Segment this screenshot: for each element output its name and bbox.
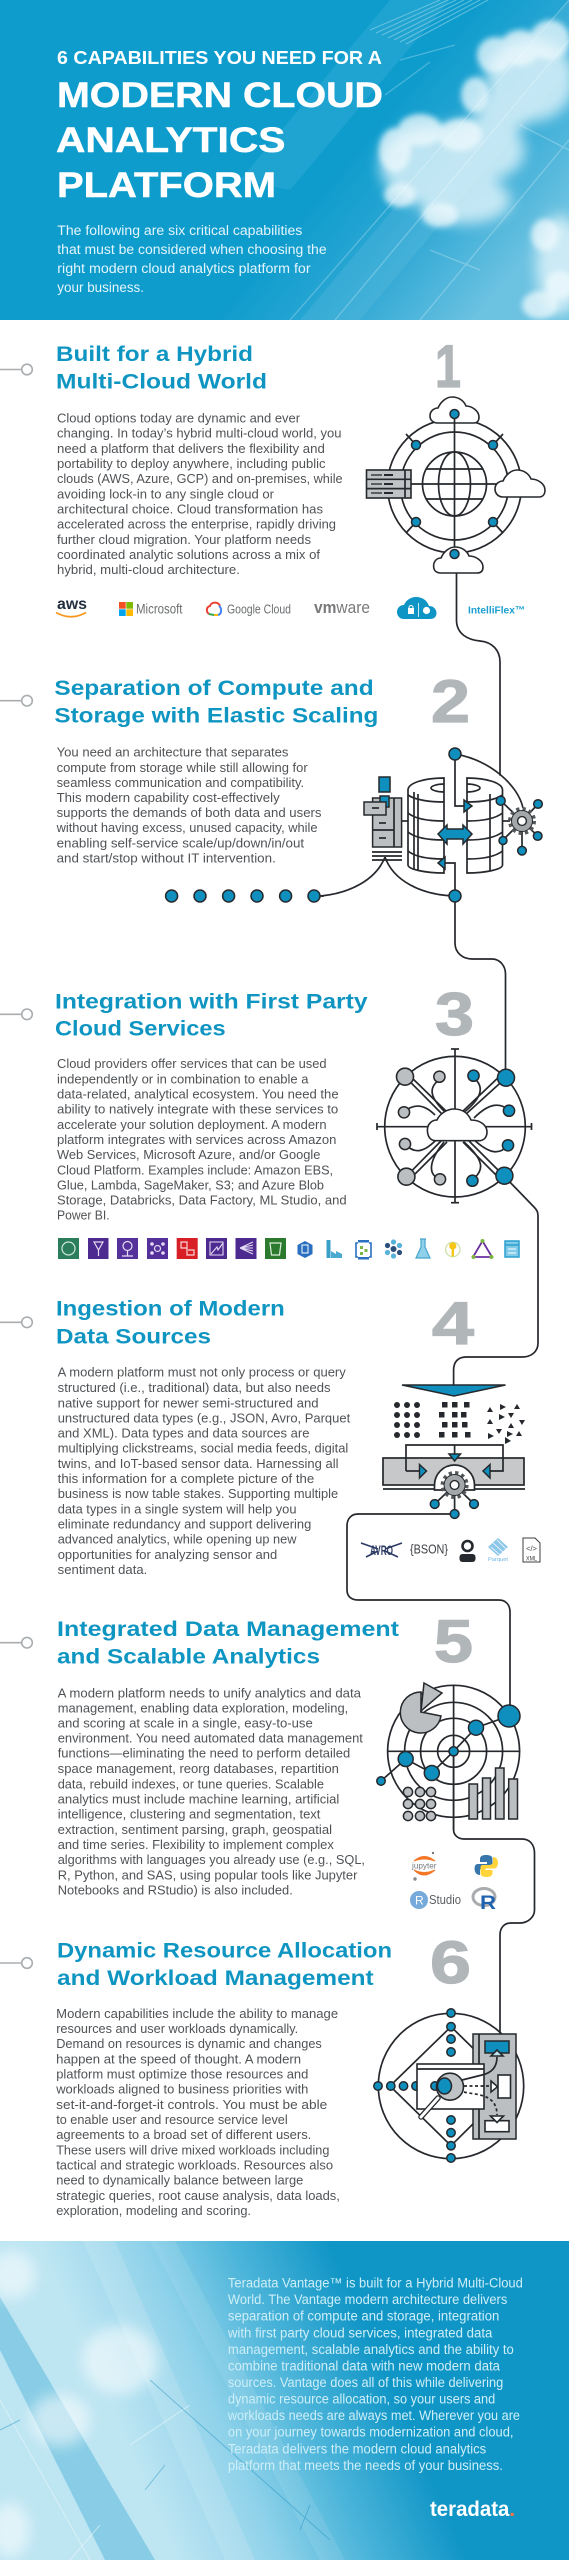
section 1 heading: Built for a Hybrid [56, 342, 253, 366]
section 1 body text: need a platform that delivers the flexibility and [57, 441, 325, 456]
section 4 connector marker [0, 1317, 32, 1328]
logos: cloud service icons [58, 1238, 519, 1260]
section 1 body text: further cloud migration. Your platform needs [57, 532, 311, 547]
magnifier [421, 2073, 464, 2117]
section 1 body text: portability to deploy anywhere, including public [57, 456, 326, 471]
section 6 body text: set-it-and-forget-it controls. You must be able [56, 2097, 327, 2112]
connector line running through sections [347, 573, 538, 2042]
logo: Teradata cloud [397, 597, 436, 619]
section 1 heading [56, 342, 267, 393]
header intro text [57, 223, 327, 295]
section 2 body text: This modern capability cost-effectively [57, 790, 280, 805]
section 3 body text [57, 1056, 347, 1223]
logo: IntelliFlex: IntelliFlex™ [468, 604, 525, 616]
section 5 body text: and scoring at scale in a single, easy-to-use [58, 1716, 313, 1731]
footer summary text: management, scalable analytics and the ability to [228, 2342, 514, 2357]
illustration: storage cylinder, cabinet and gear [321, 748, 542, 902]
section 1 panel [0, 333, 545, 619]
circle grid [403, 1787, 436, 1821]
section 2 body text: You need an architecture that separates [57, 745, 289, 760]
section 6 body text: tactical and strategic workloads. Resources also [56, 2158, 333, 2173]
main title: MODERN CLOUD [57, 76, 383, 115]
section 5 body text: and time series. Flexibility to implement complex [58, 1837, 334, 1852]
links from magnifier to panel [462, 2057, 497, 2115]
section 3 body text: Cloud Platform. Examples include: Amazon EBS, [57, 1162, 333, 1177]
section 3 heading: Cloud Services [55, 1017, 226, 1041]
section 3 body text: Power BI. [57, 1208, 110, 1223]
panel: footer [0, 2241, 569, 2560]
footer summary text [227, 2275, 523, 2473]
logo: XML: XML [526, 1556, 538, 1562]
section 3 body text: Cloud providers offer services that can be used [57, 1056, 327, 1071]
section 3 panel [0, 981, 532, 1260]
section 1 heading: Multi-Cloud World [56, 369, 267, 393]
section 2 heading: Separation of Compute and [54, 676, 374, 700]
header background with clouds and building [0, 0, 569, 320]
section 5 connector marker [0, 1637, 32, 1648]
section 5 body text: data, rebuild indexes, or tune queries. Scalable [58, 1776, 324, 1791]
section 2 connector marker [0, 695, 32, 706]
section 2 body text [56, 745, 322, 865]
section 6 body text: to enable user and resource service level [56, 2112, 288, 2127]
footer summary text: World. The Vantage modern architecture delivers [228, 2292, 508, 2307]
section 5 body text: environment. You need automated data management [58, 1731, 363, 1746]
section 5 body text: A modern platform needs to unify analytics and data [58, 1685, 362, 1700]
section 6 connector marker [0, 1958, 32, 1968]
section 6 body text: agreements to a broad set of different users. [56, 2127, 311, 2142]
logo: Avro: AVRO [370, 1542, 393, 1558]
intake box [383, 1445, 525, 1490]
triangle data points [487, 1404, 525, 1444]
section 3 connector marker [0, 1009, 32, 1020]
header intro text: that must be considered when choosing the [57, 242, 327, 257]
section 2 body text: supports the demands of both data and users [57, 805, 322, 820]
section 6 panel [0, 1929, 524, 2218]
logo: RStudio: R [415, 1894, 424, 1908]
section 3 body text: platform integrates with services across Amazon [57, 1132, 336, 1147]
illustration: cloud hub with services [377, 1049, 532, 1203]
main title [56, 76, 383, 205]
control panel [473, 2034, 516, 2139]
data points [377, 1705, 520, 1785]
round data points [394, 1402, 420, 1438]
row of dots [166, 890, 324, 902]
illustration: hybrid cloud globe [366, 397, 545, 573]
section 6 body text: resources and user workloads dynamically. [56, 2021, 298, 2036]
section 6 body text: workloads aligned to business priorities with [55, 2082, 308, 2097]
section 2 body text: enabling self-service scale/up/down/in/out [57, 835, 304, 850]
section 5 body text [58, 1685, 365, 1897]
section 5 body text: intelligence, clustering and segmentation, text [58, 1807, 321, 1822]
section 6 body text: Demand on resources is dynamic and changes [56, 2036, 322, 2051]
logo: teradata: teradata. [430, 2498, 515, 2521]
window [417, 2064, 484, 2109]
logo: aws: aws [57, 596, 87, 613]
section 1 body text [57, 410, 343, 577]
section 2 heading: Storage with Elastic Scaling [54, 704, 378, 728]
logo: Google Cloud [207, 602, 291, 616]
section 4 heading: Data Sources [56, 1324, 211, 1348]
header intro text: The following are six critical capabilities [57, 223, 303, 238]
footer summary text: combine traditional data with new modern data [228, 2358, 500, 2373]
footer summary text: Teradata delivers the modern cloud analytics [228, 2441, 486, 2456]
section 1 number: 1 [435, 333, 461, 400]
section 5 body text: extraction, sentiment parsing, graph, geospatial [58, 1822, 332, 1837]
section 4 body text: multiplying clickstreams, social media feeds, digital [58, 1441, 348, 1456]
section 3 heading [55, 989, 368, 1041]
section 1 body text: hybrid, multi-cloud architecture. [57, 562, 240, 577]
logo: Parquet [488, 1538, 508, 1563]
section 6 body text [55, 2006, 340, 2218]
section 4 body text: unstructured data types (e.g., JSON, Avro, Parquet [58, 1410, 351, 1425]
section 3 heading: Integration with First Party [55, 989, 368, 1013]
section 5 body text: Notebooks and RStudio) is also included. [58, 1882, 293, 1897]
pie chart [400, 1683, 442, 1733]
logos: data formats [361, 1538, 540, 1563]
main title: ANALYTICS [56, 121, 286, 160]
section 6 heading: and Workload Management [57, 1966, 374, 1990]
section 4 body text: this information for a complete picture of the [58, 1471, 314, 1486]
illustration: analytics radar with charts [377, 1683, 520, 1830]
footer summary text: dynamic resource allocation, so your users and [228, 2392, 495, 2407]
section 4 body text: opportunities for analyzing sensor and [58, 1547, 277, 1562]
node chains [374, 2009, 455, 2162]
section 2 number: 2 [431, 668, 470, 735]
section 5 heading: Integrated Data Management [57, 1617, 399, 1641]
section 5 body text: space management, reorg databases, repartition [58, 1761, 339, 1776]
footer summary text: platform that meets the needs of your business. [228, 2458, 503, 2473]
section 2 body text: seamless communication and compatibility. [57, 775, 304, 790]
section 3 body text: ability to natively integrate with these services to [57, 1102, 338, 1117]
footer summary text: workloads needs are always met. Wherever you are [227, 2408, 520, 2423]
section 2 body text: compute from storage while still allowing for [57, 760, 308, 775]
footer summary text: sources. Vantage does all of this while delivering [228, 2375, 503, 2390]
double arrow [438, 825, 472, 844]
footer summary text: with first party cloud services, integrated data [227, 2325, 493, 2340]
section 6 body text: platform must optimize those resources and [56, 2067, 308, 2082]
section 2 panel [0, 668, 542, 902]
footer summary text: on your journey towards modernization and cloud, [228, 2425, 514, 2440]
section 4 number: 4 [432, 1290, 475, 1357]
header intro text: right modern cloud analytics platform for [57, 261, 311, 276]
square data points [439, 1402, 470, 1438]
section 3 number: 3 [435, 981, 474, 1048]
section 1 body text: avoiding lock-in to any single cloud or [57, 486, 275, 501]
section 5 body text: management, enabling data exploration, modeling, [58, 1701, 348, 1716]
logos: cloud partners [56, 596, 525, 619]
section 5 body text: analytics must include machine learning, artificial [58, 1791, 339, 1806]
section 6 body text: need to dynamically balance between large [56, 2173, 303, 2188]
section 1 body text: architectural choice. Cloud transformation has [57, 502, 323, 516]
section 6 body text: happen at the speed of thought. A modern [56, 2051, 301, 2066]
gear with nodes [430, 1473, 478, 1518]
footer summary text: Teradata Vantage™ is built for a Hybrid Multi-Cloud [228, 2275, 523, 2290]
section 4 body text: advanced analytics, while opening up new [58, 1532, 297, 1547]
section 4 body text: structured (i.e., traditional) data, but also needs [58, 1380, 331, 1395]
main title: PLATFORM [57, 166, 276, 205]
logo: Avro [361, 1542, 402, 1558]
footer background with building and clouds [0, 2241, 569, 2560]
section 4 heading [56, 1297, 285, 1348]
logo: Parquet: Parquet [488, 1557, 508, 1563]
section 2 heading [54, 676, 378, 728]
node network around gear [321, 754, 538, 896]
section 5 number: 5 [434, 1608, 473, 1675]
logos: analytics tools [410, 1852, 498, 1914]
section 6 body text: strategic queries, root cause analysis, data loads, [56, 2188, 340, 2203]
section 4 panel [0, 1290, 540, 1577]
section 1 body text: coordinated analytic solutions across a mix of [57, 547, 320, 562]
logo: XML: </> [526, 1544, 538, 1553]
section 5 heading [57, 1617, 399, 1668]
section 2 body text: and start/stop without IT intervention. [57, 850, 276, 865]
section 5 body text: functions—eliminating the need to perform detailed [58, 1746, 350, 1761]
filing cabinet [364, 777, 402, 860]
section 6 number: 6 [430, 1929, 471, 1996]
logo: vmware: vmware [314, 598, 370, 617]
gear [510, 809, 534, 833]
logo: XML [523, 1538, 540, 1562]
section 5 panel [0, 1608, 520, 1914]
logo: BSON: {BSON} [410, 1542, 448, 1556]
section 1 body text: changing. In today’s hybrid multi-cloud world, you [57, 426, 342, 441]
section 4 heading: Ingestion of Modern [56, 1297, 285, 1321]
section 3 body text: Storage, Databricks, Data Factory, ML Studio, and [57, 1193, 347, 1208]
section 4 body text: data types in a single system will help you [58, 1501, 297, 1516]
section 4 body text [58, 1365, 351, 1577]
section 3 body text: independently or in combination to enable a [57, 1071, 309, 1086]
section 3 body text: data-related, analytical ecosystem. You need the [57, 1086, 339, 1101]
header kicker: 6 CAPABILITIES YOU NEED FOR A [57, 48, 382, 68]
logo: ORC [460, 1541, 476, 1562]
section 2 body text: without having excess, unused capacity, while [56, 820, 318, 835]
section 5 body text: algorithms with languages you already use (e.g., SQL, [58, 1852, 365, 1867]
storage cylinder [408, 778, 502, 873]
section 5 heading: and Scalable Analytics [57, 1644, 320, 1668]
logo: Python [475, 1855, 498, 1877]
section 4 body text: and XML). Data types and data sources are [58, 1425, 310, 1440]
section 3 body text: accelerate your solution deployment. A modern [57, 1117, 327, 1132]
section 1 connector marker [0, 364, 32, 375]
header intro text: your business. [57, 280, 144, 295]
section 3 body text: Glue, Lambda, SageMaker, S3; and Azure Blob [57, 1177, 324, 1192]
section 3 body text: Web Services, Microsoft Azure, and/or Google [57, 1147, 320, 1162]
funnel arrow [402, 1385, 506, 1396]
section 1 body text: accelerated across the enterprise, rapidly driving [57, 517, 336, 532]
section 4 body text: twins, and IoT-based sensor data. Harnessing all [58, 1456, 339, 1471]
section 6 heading [57, 1939, 392, 1990]
section 6 body text: These users will drive mixed workloads including [56, 2142, 329, 2157]
footer summary text: separation of compute and storage, integration [228, 2309, 499, 2324]
section 5 body text: R, Python, and SAS, using popular tools like Jupyter [58, 1867, 358, 1882]
section 6 body text: exploration, modeling and scoring. [56, 2203, 251, 2218]
panel: header [0, 0, 569, 320]
section 4 body text: business is now table stakes. Supporting multiple [58, 1486, 338, 1501]
logo: RStudio: Studio [429, 1892, 461, 1907]
section 4 body text: sentiment data. [58, 1562, 147, 1577]
logo: Jupyter: jupyter [411, 1862, 437, 1870]
section 4 body text: eliminate redundancy and support delivering [58, 1517, 311, 1532]
section 1 body text: clouds (AWS, Azure, GCP) and on-premises, while [57, 471, 343, 486]
logo: Google Cloud: Google Cloud [227, 602, 291, 616]
bar chart [469, 1768, 518, 1819]
illustration: workload management [374, 2009, 524, 2162]
section 6 body text: Modern capabilities include the ability to manage [56, 2006, 338, 2021]
section 4 body text: A modern platform must not only process or query [58, 1365, 346, 1380]
illustration: data ingestion funnel [383, 1385, 525, 1518]
section 6 heading: Dynamic Resource Allocation [57, 1939, 392, 1963]
logo: Microsoft: Microsoft [136, 602, 183, 616]
logo: Microsoft [119, 602, 183, 616]
section 1 body text: Cloud options today are dynamic and ever [57, 410, 301, 426]
logo: R: R [480, 1893, 496, 1914]
section 4 body text: native support for newer semi-structured and [58, 1395, 319, 1410]
logo: RStudio [410, 1891, 461, 1909]
